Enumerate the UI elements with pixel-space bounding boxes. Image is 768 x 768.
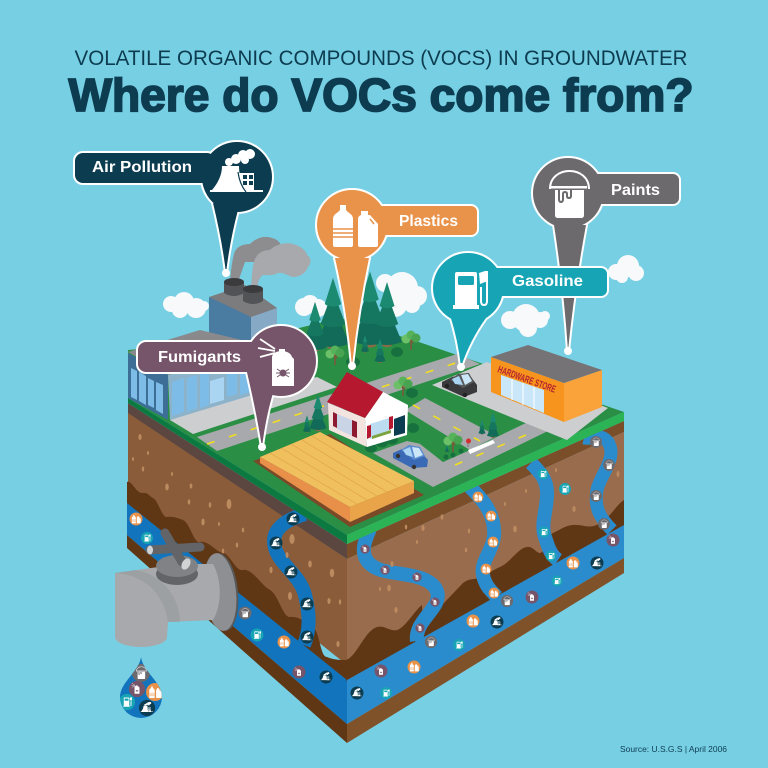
pin: gasoline bbox=[433, 253, 607, 371]
clouds bbox=[163, 255, 644, 337]
factory building bbox=[128, 278, 277, 420]
pin: fumigants: Fumigants bbox=[158, 349, 241, 366]
block: right soil face bbox=[339, 421, 624, 743]
house bbox=[327, 372, 408, 447]
bushes and round trees bbox=[326, 330, 471, 460]
pin: air pollution bbox=[75, 142, 272, 277]
water drop with contaminants bbox=[119, 657, 164, 718]
evergreen trees bbox=[303, 272, 499, 452]
faucet bbox=[115, 533, 242, 647]
block: left soil face bbox=[127, 403, 347, 743]
pin: plastics bbox=[317, 190, 477, 370]
pin: fumigants bbox=[138, 326, 316, 451]
chimneys bbox=[224, 282, 244, 296]
smoke from factory chimneys bbox=[230, 237, 310, 288]
hardware store bbox=[491, 345, 602, 422]
pin: plastics: Plastics bbox=[399, 213, 458, 230]
title: headline: Where do VOCs come from? bbox=[68, 69, 694, 121]
small contaminant icons in groundwater bbox=[130, 436, 619, 699]
block: top surface bbox=[128, 318, 624, 544]
vein bbox=[274, 514, 309, 645]
title: kicker: VOLATILE ORGANIC COMPOUNDS (VOCS) IN GROUNDWATER bbox=[74, 47, 688, 70]
mailbox bbox=[467, 441, 469, 447]
farm field bbox=[253, 432, 424, 527]
pin: paints bbox=[533, 158, 679, 355]
source note: Source: U.S.G.S | April 2006 bbox=[620, 744, 727, 754]
pin: air pollution: Air Pollution bbox=[92, 159, 192, 176]
store sign: HARDWARE STORE bbox=[496, 364, 557, 396]
pin: gasoline: Gasoline bbox=[512, 273, 583, 290]
black car bbox=[442, 373, 477, 397]
blue car bbox=[393, 445, 428, 469]
pin: paints: Paints bbox=[611, 182, 660, 199]
roads bbox=[170, 354, 608, 487]
